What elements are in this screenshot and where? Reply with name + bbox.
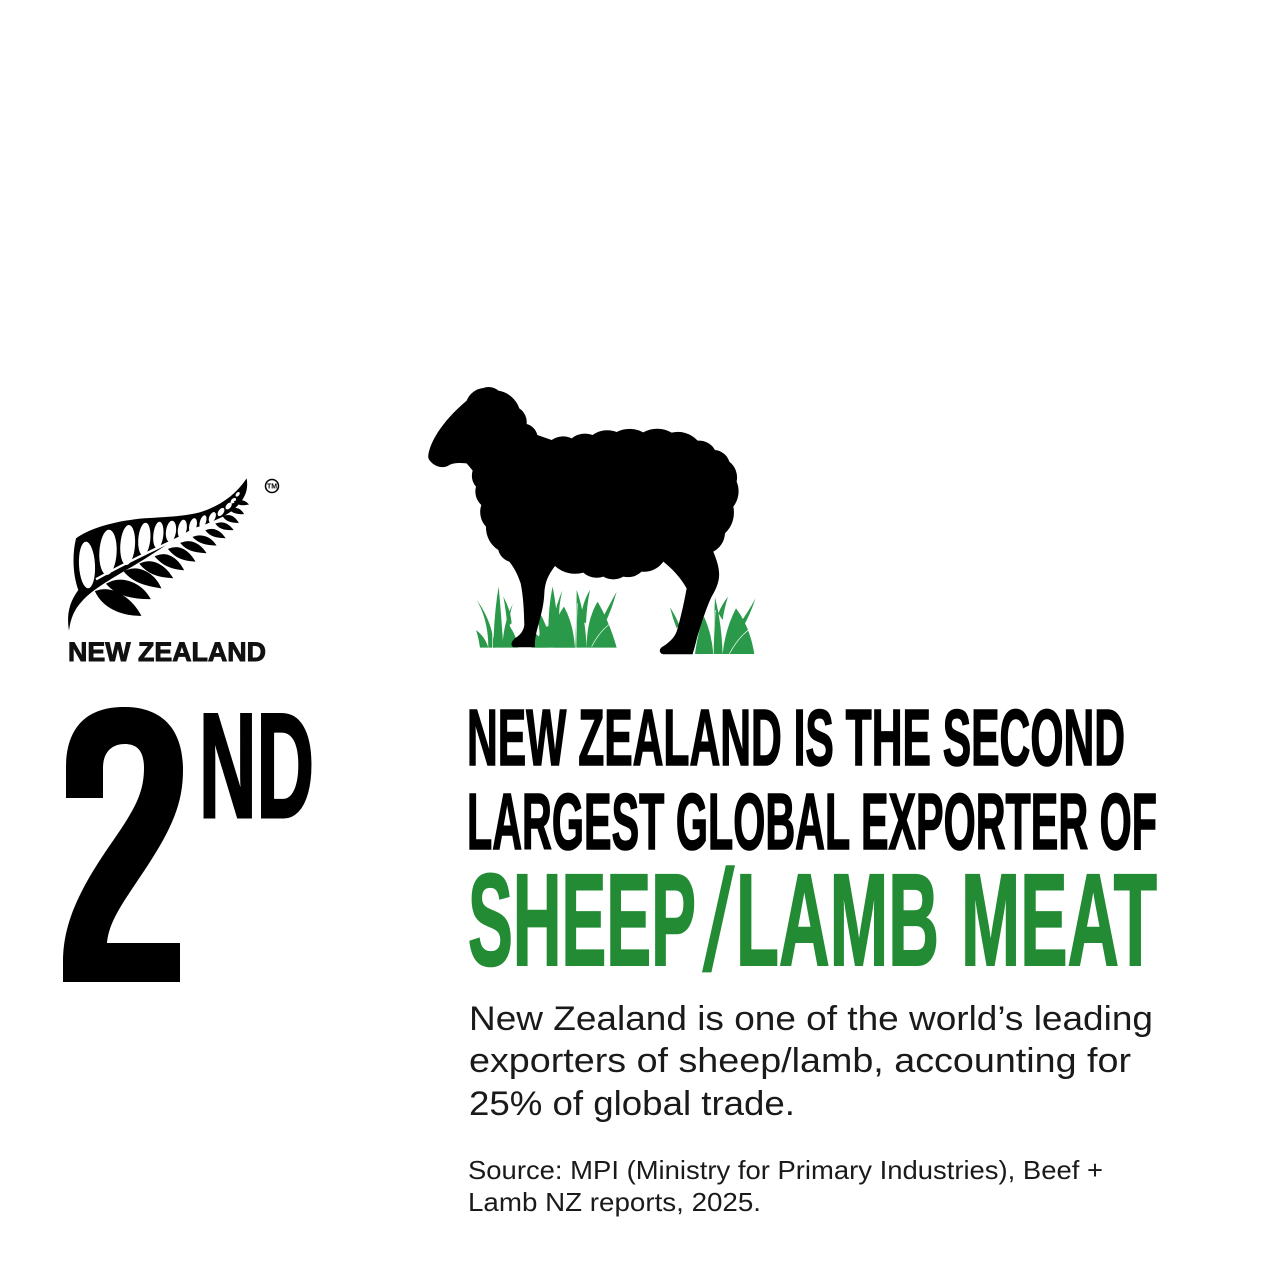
body line 2: exporters of sheep/lamb, accounting for — [469, 1042, 1131, 1080]
icon: sheep silhouette — [428, 387, 739, 654]
logo: New Zealand fern mark — [68, 478, 278, 667]
body paragraph — [469, 1000, 1153, 1123]
headline line 3: green highlight: SHEEP — [468, 846, 696, 993]
icon: sheep on grass — [428, 387, 756, 654]
superscript ND: ND — [199, 682, 314, 849]
headline — [467, 693, 1157, 1002]
icon: silver fern — [68, 478, 247, 631]
source line 1: Source: MPI (Ministry for Primary Industries), Beef + — [468, 1155, 1103, 1185]
logo wordmark: NEW ZEALAND — [68, 637, 266, 667]
source line 2: Lamb NZ reports, 2025. — [468, 1187, 761, 1217]
headline line 3: green highlight — [468, 839, 1157, 1002]
body line 1: New Zealand is one of the world’s leading — [469, 1000, 1153, 1038]
headline line 3: green highlight: LAMB — [736, 846, 939, 993]
headline line 3: green highlight: / — [702, 839, 735, 1002]
numeral 2 — [63, 707, 183, 982]
icon: trademark symbol — [266, 480, 278, 492]
body line 3: 25% of global trade. — [469, 1085, 795, 1123]
big ordinal: 2nd — [63, 682, 314, 982]
icon: grass — [476, 587, 756, 654]
icon: trademark symbol: TM — [267, 484, 277, 491]
source note — [468, 1155, 1103, 1217]
